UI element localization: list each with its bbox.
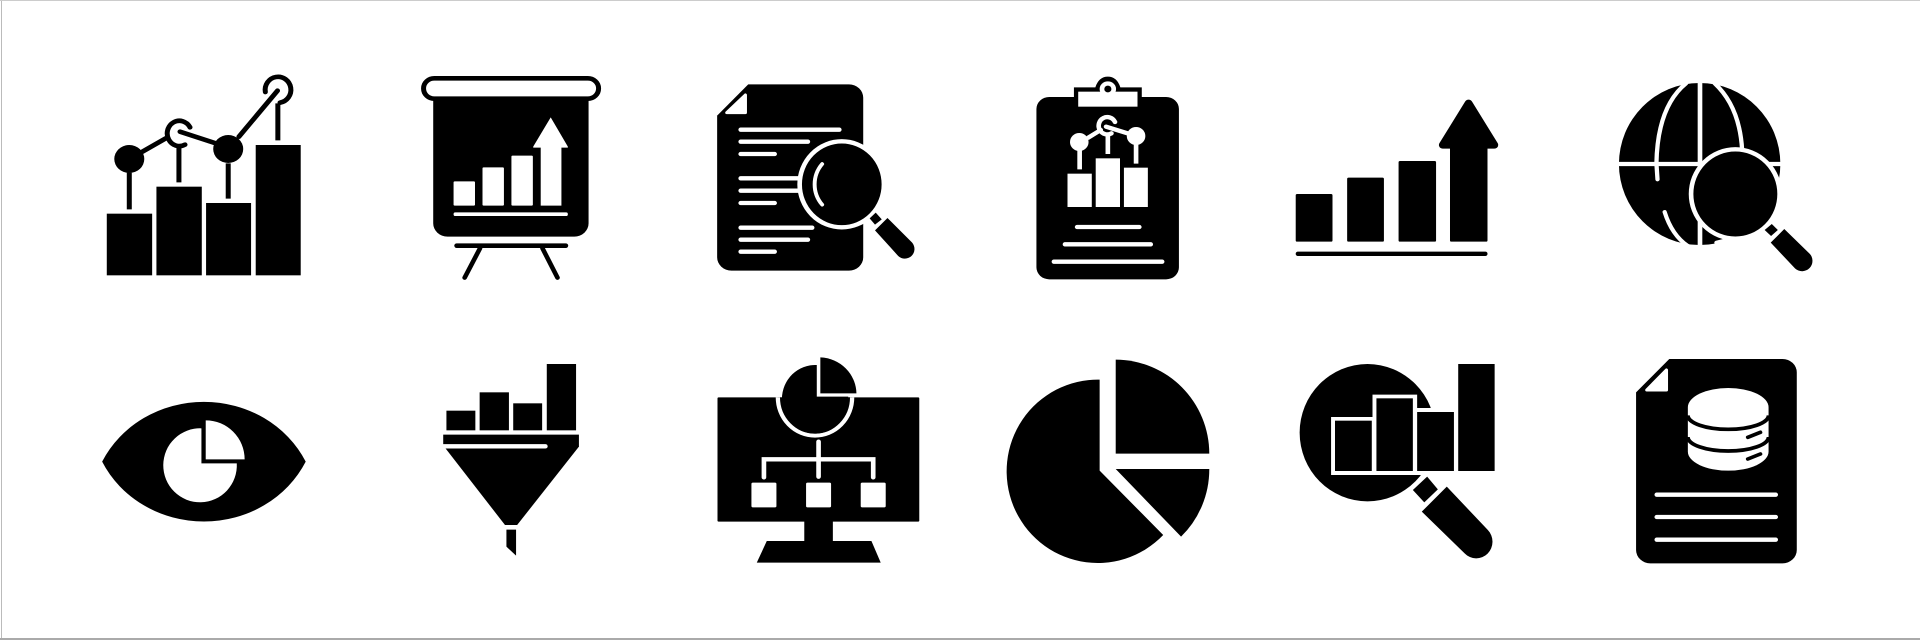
icon: rising bars with arrow: [1296, 103, 1494, 256]
icon: document with database: [1636, 359, 1797, 563]
icon: eye with pie chart: [102, 402, 306, 521]
icon: pie chart: [1007, 360, 1209, 563]
icon: monitor with pie chart and hierarchy: [717, 357, 919, 563]
icon: globe with magnifier: [1616, 80, 1812, 271]
icon: magnifier over bar chart: [1300, 364, 1495, 558]
icon: bar chart with line nodes: [107, 77, 301, 275]
icon: clipboard with chart: [1036, 77, 1179, 279]
icon: presentation board: [424, 78, 599, 278]
icon: document with magnifier: [717, 84, 914, 271]
icon: funnel with bars: [443, 364, 579, 556]
